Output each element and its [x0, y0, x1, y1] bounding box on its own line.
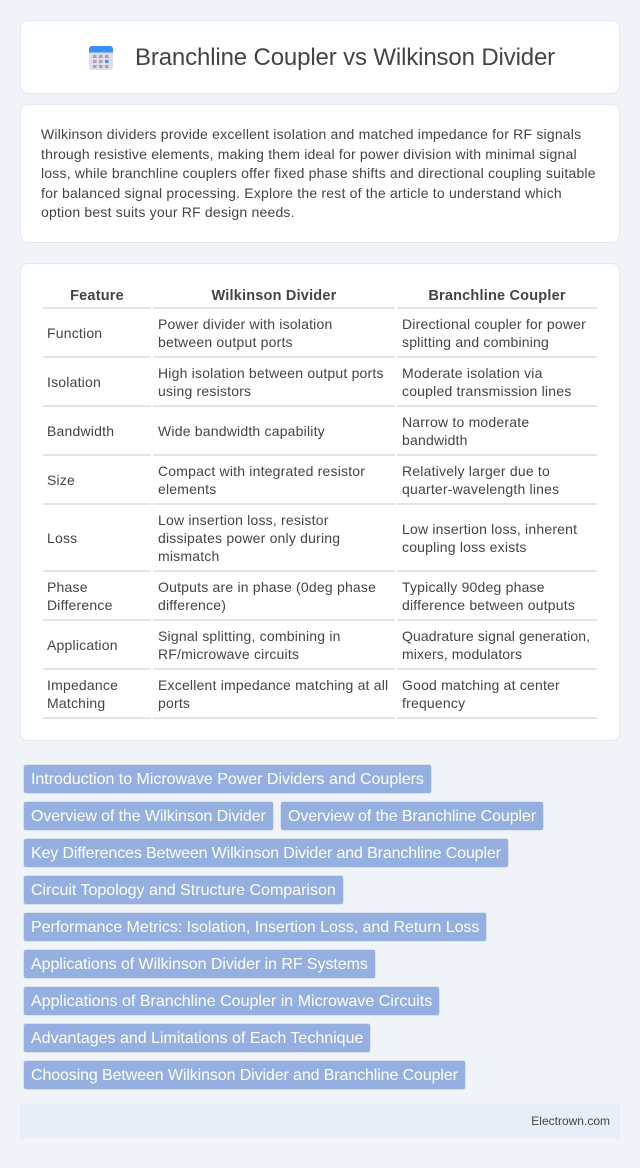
- intro text: [41, 126, 596, 220]
- table contents: mixers, modulators: [402, 646, 522, 662]
- topic chips: Overview of the Wilkinson Divider: [31, 808, 266, 825]
- table contents: High isolation between output ports: [158, 365, 384, 381]
- table contents: Size: [47, 472, 75, 488]
- table contents: Isolation: [47, 374, 101, 390]
- table contents: using resistors: [158, 383, 251, 399]
- topic chips: Choosing Between Wilkinson Divider and Branchline Coupler: [31, 1067, 458, 1084]
- intro card: [20, 104, 620, 243]
- table contents: Directional coupler for power: [402, 316, 586, 332]
- table contents: Difference: [47, 597, 113, 613]
- table contents: Power divider with isolation: [158, 316, 332, 332]
- topic chips: Applications of Wilkinson Divider in RF Systems: [31, 956, 368, 973]
- table contents: RF/microwave circuits: [158, 646, 299, 662]
- topic chips: Key Differences Between Wilkinson Divider and Branchline Coupler: [31, 845, 501, 862]
- table contents: between output ports: [158, 334, 293, 350]
- table contents: Wilkinson Divider: [212, 288, 336, 304]
- topic chips: Performance Metrics: Isolation, Insertion Loss, and Return Loss: [31, 919, 479, 936]
- table contents: Wide bandwidth capability: [158, 423, 325, 439]
- topic chips: Introduction to Microwave Power Dividers and Couplers: [31, 771, 424, 788]
- table contents: coupling loss exists: [402, 539, 527, 555]
- intro text: Wilkinson dividers provide excellent isolation and matched impedance for RF signals: [41, 126, 581, 142]
- table contents: Outputs are in phase (0deg phase: [158, 579, 376, 595]
- table contents: dissipates power only during: [158, 530, 340, 546]
- intro text: option best suits your RF design needs.: [41, 204, 295, 220]
- table contents: Quadrature signal generation,: [402, 628, 590, 644]
- topic chips: Overview of the Branchline Coupler: [288, 808, 536, 825]
- table contents: elements: [158, 481, 216, 497]
- topic chips: Applications of Branchline Coupler in Microwave Circuits: [31, 993, 432, 1010]
- table contents: Matching: [47, 695, 105, 711]
- topic chips: Circuit Topology and Structure Comparison: [31, 882, 336, 899]
- table contents: quarter-wavelength lines: [402, 481, 559, 497]
- icon: calendar: [89, 46, 113, 70]
- table contents: Narrow to moderate: [402, 414, 529, 430]
- table contents: Application: [47, 637, 118, 653]
- table contents: splitting and combining: [402, 334, 549, 350]
- intro text: for balanced signal processing. Explore the rest of the article to understand which: [41, 184, 562, 200]
- table contents: difference): [158, 597, 226, 613]
- table contents: Branchline Coupler: [428, 288, 566, 304]
- table contents: Good matching at center: [402, 677, 560, 693]
- table contents: difference between outputs: [402, 597, 575, 613]
- table contents: Excellent impedance matching at all: [158, 677, 388, 693]
- table contents: Typically 90deg phase: [402, 579, 545, 595]
- table contents: Impedance: [47, 677, 118, 693]
- comparison table card: [20, 263, 620, 741]
- intro text: loss, while branchline couplers offer fixed phase shifts and directional coupling suitable: [41, 165, 596, 181]
- table contents: ports: [158, 695, 190, 711]
- table contents: Phase: [47, 579, 88, 595]
- table contents: Loss: [47, 530, 77, 546]
- table contents: coupled transmission lines: [402, 383, 571, 399]
- table contents: Function: [47, 325, 102, 341]
- intro text: through resistive elements, making them ideal for power division with minimal signal: [41, 146, 577, 162]
- topic chips: Advantages and Limitations of Each Technique: [31, 1030, 363, 1047]
- table contents: Low insertion loss, resistor: [158, 512, 329, 528]
- table contents: frequency: [402, 695, 465, 711]
- table contents: Low insertion loss, inherent: [402, 521, 577, 537]
- footer credit: Electrown.com: [531, 1114, 610, 1128]
- table contents: mismatch: [158, 548, 220, 564]
- table contents: Compact with integrated resistor: [158, 463, 365, 479]
- table contents: Moderate isolation via: [402, 365, 543, 381]
- table contents: Relatively larger due to: [402, 463, 550, 479]
- header card: [20, 20, 620, 94]
- title: Branchline Coupler vs Wilkinson Divider: [135, 44, 555, 71]
- table contents: bandwidth: [402, 432, 468, 448]
- table contents: Bandwidth: [47, 423, 114, 439]
- footer: [20, 1104, 620, 1138]
- table contents: Signal splitting, combining in: [158, 628, 341, 644]
- table contents: Feature: [70, 288, 124, 304]
